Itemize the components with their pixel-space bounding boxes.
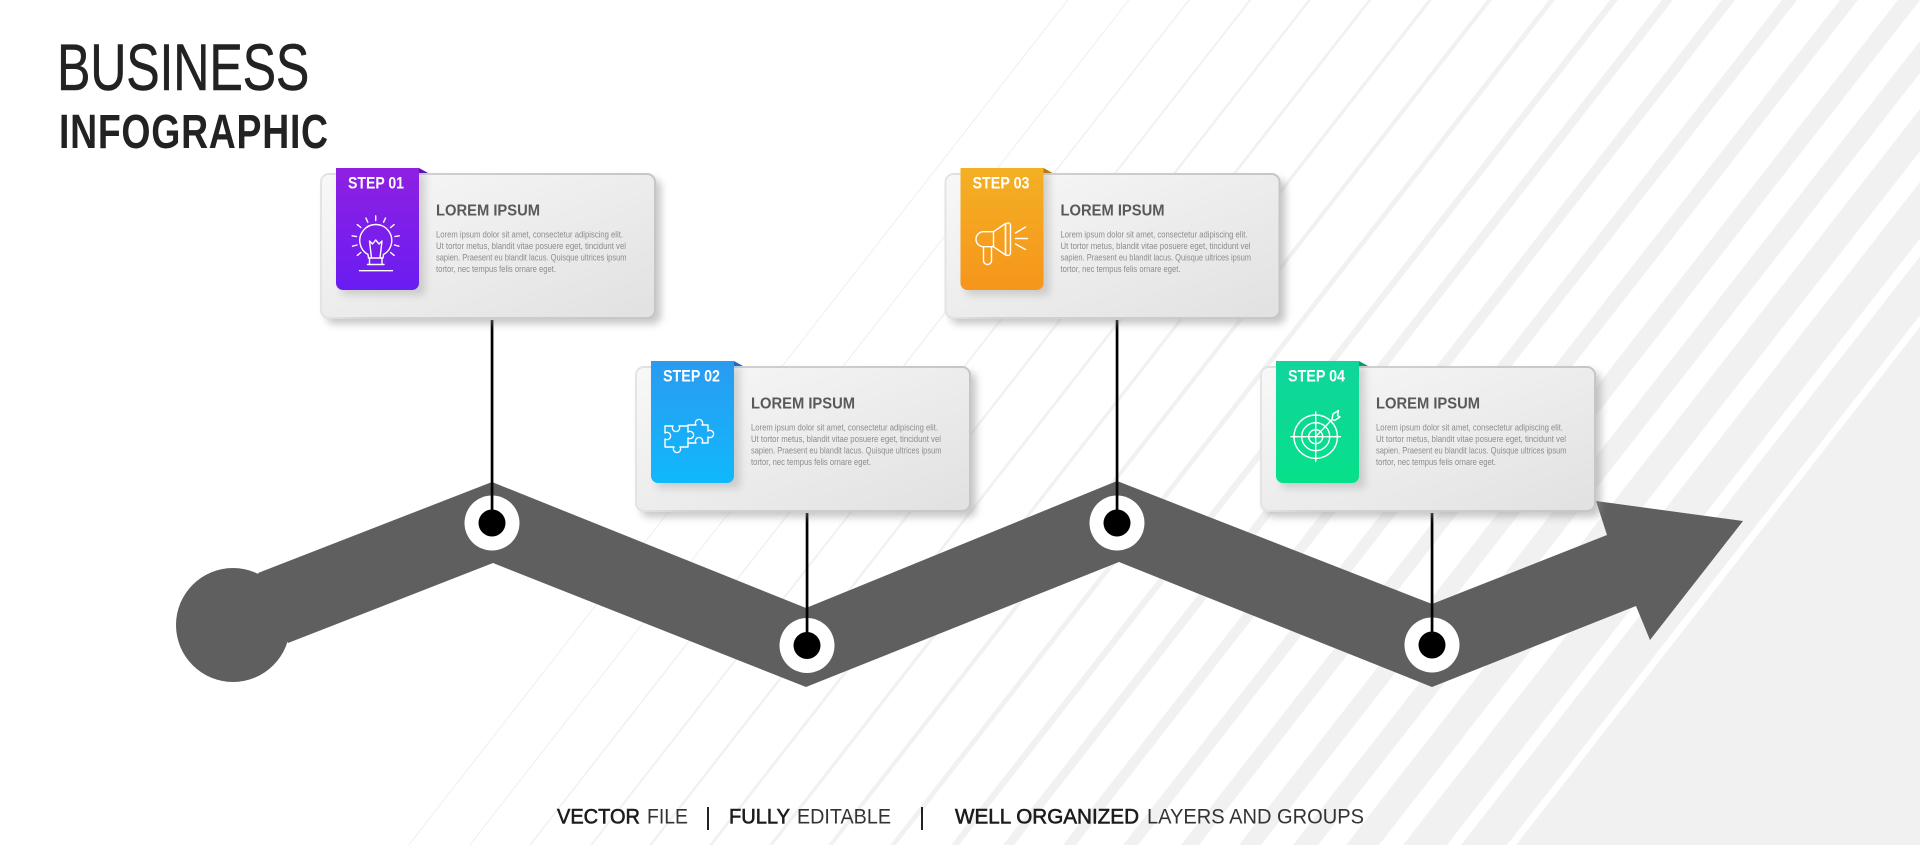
- heading: LOREM IPSUM: [751, 396, 855, 412]
- footer text: WELL ORGANIZED: [955, 806, 1139, 828]
- body text: tortor, nec tempus felis ornare eget.: [1060, 264, 1180, 275]
- footer text: [557, 806, 1364, 830]
- body text: tortor, nec tempus felis ornare eget.: [1376, 457, 1496, 468]
- footer text: LAYERS AND GROUPS: [1147, 806, 1364, 828]
- body text: Lorem ipsum dolor sit amet, consectetur adipiscing elit.: [436, 230, 623, 240]
- body text: sapien. Praesent eu blandit lacus. Quisque ultrices ipsum: [1060, 252, 1251, 264]
- marker 2: [780, 513, 834, 673]
- body text: sapien. Praesent eu blandit lacus. Quisque ultrices ipsum: [1376, 446, 1567, 456]
- panel: step 03: [946, 168, 1286, 324]
- heading: LOREM IPSUM: [436, 202, 540, 220]
- body text: [1376, 422, 1567, 468]
- step label: STEP 01: [348, 174, 404, 192]
- body text: Ut tortor metus, blandit vitae posuere eget, tincidunt vel: [751, 434, 941, 445]
- icon: megaphone: [976, 223, 1028, 264]
- panel: step 02: [636, 361, 976, 517]
- body text: Ut tortor metus, blandit vitae posuere eget, tincidunt vel: [436, 241, 626, 252]
- footer text: FULLY: [729, 806, 790, 828]
- footer text: EDITABLE: [797, 806, 891, 828]
- body text: tortor, nec tempus felis ornare eget.: [436, 264, 556, 275]
- body text: Lorem ipsum dolor sit amet, consectetur adipiscing elit.: [1376, 422, 1563, 434]
- step label: STEP 02: [663, 368, 720, 386]
- icon: light bulb: [352, 216, 399, 271]
- footer text: FILE: [647, 806, 688, 828]
- step label: STEP 03: [972, 174, 1030, 192]
- body text: Lorem ipsum dolor sit amet, consectetur adipiscing elit.: [1060, 230, 1248, 240]
- marker 4: [1404, 513, 1460, 672]
- body text: Ut tortor metus, blandit vitae posuere eget, tincidunt vel: [1376, 434, 1566, 445]
- marker 3: [1090, 320, 1144, 550]
- heading: LOREM IPSUM: [1060, 202, 1164, 220]
- icon: puzzle: [665, 419, 714, 453]
- step label: STEP 04: [1288, 368, 1346, 386]
- body text: [436, 230, 627, 275]
- body text: [1060, 230, 1251, 275]
- heading: LOREM IPSUM: [1376, 396, 1480, 412]
- body text: tortor, nec tempus felis ornare eget.: [751, 457, 871, 468]
- icon: target: [1291, 410, 1340, 462]
- title line: business: BUSINESS: [57, 31, 309, 105]
- footer text: VECTOR: [557, 806, 640, 828]
- body text: sapien. Praesent eu blandit lacus. Quisque ultrices ipsum: [436, 252, 627, 264]
- title line: infographic: INFOGRAPHIC: [59, 106, 328, 159]
- body text: Ut tortor metus, blandit vitae posuere eget, tincidunt vel: [1060, 241, 1250, 252]
- body text: Lorem ipsum dolor sit amet, consectetur adipiscing elit.: [751, 422, 938, 434]
- panel: step 04: [1261, 361, 1601, 517]
- marker 1: [464, 320, 520, 550]
- body text: sapien. Praesent eu blandit lacus. Quisque ultrices ipsum: [751, 446, 942, 456]
- body text: [751, 422, 942, 468]
- panel: step 01: [321, 168, 661, 324]
- arrow path: [176, 481, 1743, 687]
